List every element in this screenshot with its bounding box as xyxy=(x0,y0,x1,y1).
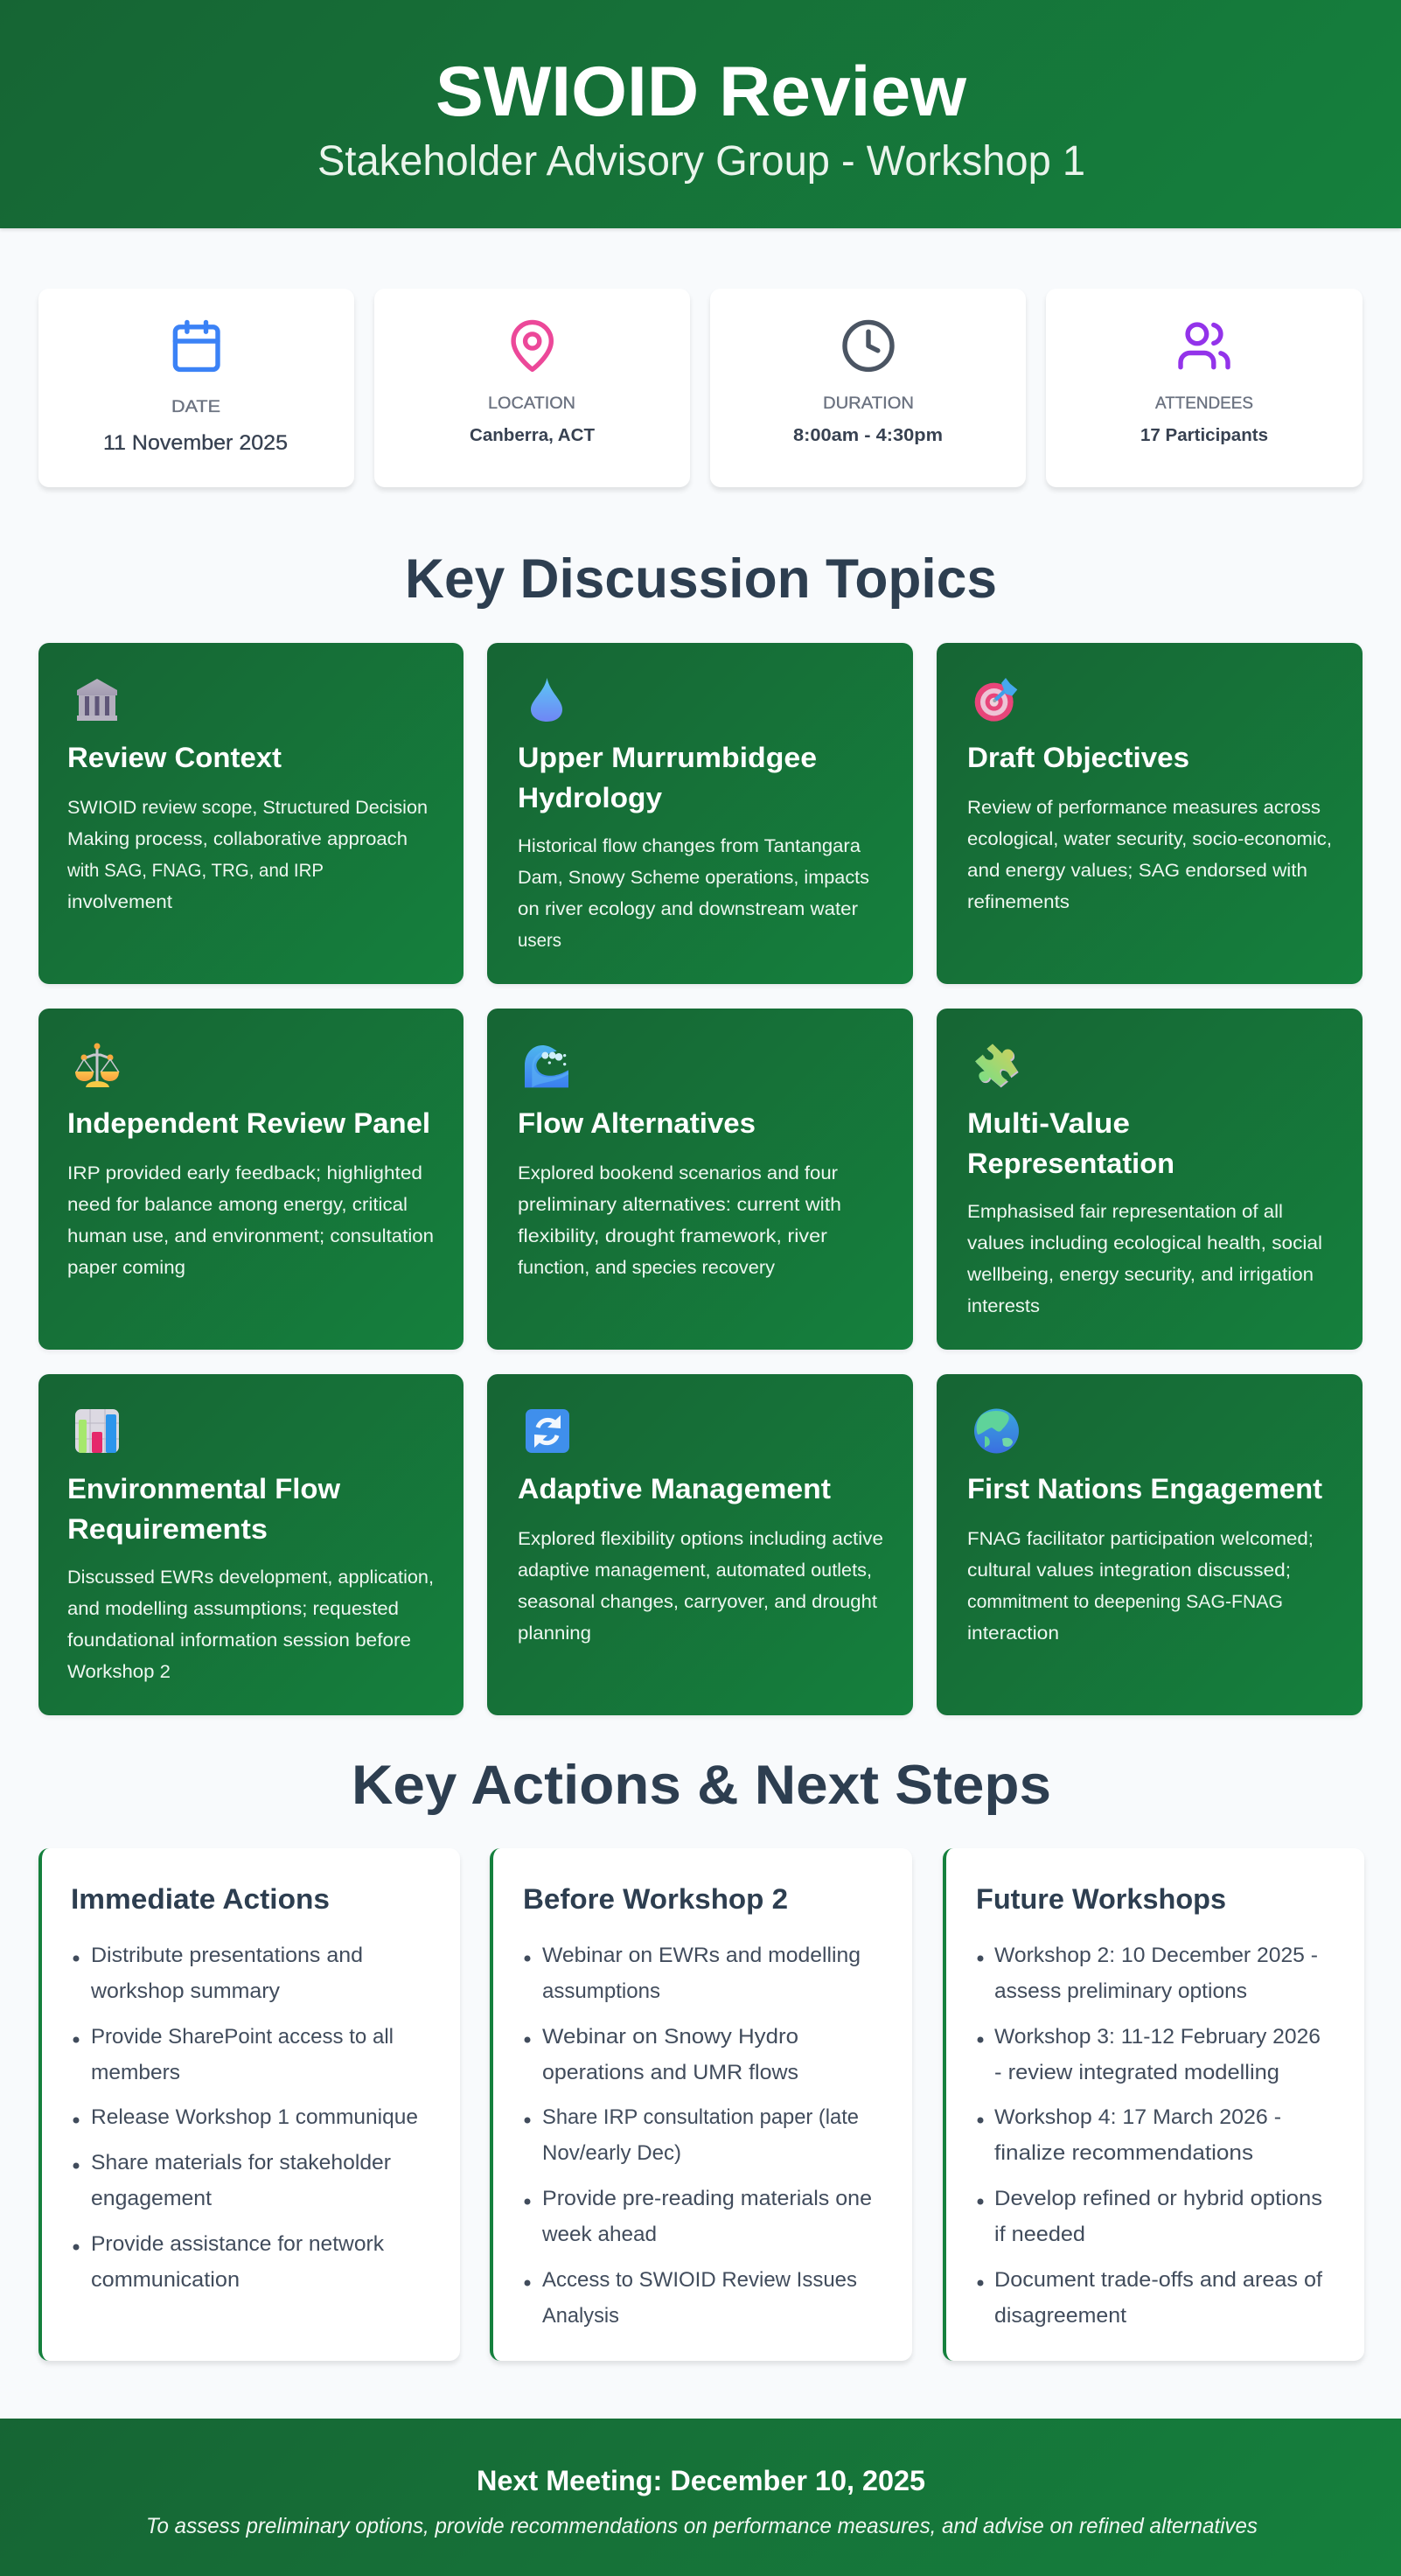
next meeting: Next Meeting: December 10, 2025 xyxy=(477,2465,925,2496)
card text: flexibility, drought framework, river xyxy=(518,1225,827,1246)
card title: Environmental Flow xyxy=(67,1473,340,1504)
subtitle: Stakeholder Advisory Group - Workshop 1 xyxy=(317,138,1085,185)
card title: Independent Review Panel xyxy=(67,1107,430,1139)
card text: foundational information session before xyxy=(67,1630,411,1651)
card text: interaction xyxy=(967,1623,1059,1644)
action list: Provide pre-reading materials one xyxy=(542,2187,872,2210)
action list xyxy=(73,1944,418,2292)
action list: assess preliminary options xyxy=(994,1979,1247,2003)
icon: balance scales xyxy=(75,1043,119,1087)
card text: interests xyxy=(967,1295,1040,1316)
card title: Requirements xyxy=(67,1513,268,1545)
card title xyxy=(967,1107,1174,1179)
card text xyxy=(518,1528,883,1644)
action list: Share IRP consultation paper (late xyxy=(542,2105,859,2129)
card text: Workshop 2 xyxy=(67,1661,171,1682)
heading: key actions and next steps: Key Actions & Next Steps xyxy=(352,1755,1051,1816)
action list: - review integrated modelling xyxy=(994,2061,1279,2084)
card text: human use, and environment; consultation xyxy=(67,1225,434,1246)
action list: Develop refined or hybrid options xyxy=(994,2187,1322,2210)
panel: upper murrumbidgee hydrology xyxy=(487,643,913,984)
value: 11 November 2025 xyxy=(103,431,288,455)
icon: globe xyxy=(974,1408,1019,1454)
card text: Explored bookend scenarios and four xyxy=(518,1162,838,1183)
action list: Workshop 3: 11-12 February 2026 xyxy=(994,2025,1321,2049)
card title xyxy=(518,742,817,813)
card text: and energy values; SAG endorsed with xyxy=(967,860,1307,881)
action list: Document trade-offs and areas of xyxy=(994,2268,1322,2292)
icon: puzzle piece xyxy=(975,1044,1019,1087)
label: LOCATION xyxy=(488,394,575,413)
action list: communication xyxy=(91,2268,240,2292)
card text xyxy=(966,1201,1322,1316)
panel: environmental flow requirements xyxy=(38,1374,464,1715)
info card: duration xyxy=(710,289,1026,487)
action list: Provide SharePoint access to all xyxy=(91,2025,394,2049)
panel: draft objectives xyxy=(937,643,1363,984)
card title xyxy=(67,1473,340,1545)
icon: calendar xyxy=(175,322,218,369)
panel: flow alternatives xyxy=(487,1009,913,1350)
card title: Hydrology xyxy=(518,782,662,813)
panel: before workshop 2 xyxy=(490,1848,912,2361)
card title: Flow Alternatives xyxy=(518,1107,756,1139)
card text xyxy=(518,1162,841,1278)
action list: finalize recommendations xyxy=(994,2141,1253,2165)
card title: Draft Objectives xyxy=(967,742,1189,773)
card text: planning xyxy=(518,1623,591,1644)
action list: Workshop 2: 10 December 2025 - xyxy=(994,1944,1318,1967)
card title: Upper Murrumbidgee xyxy=(518,742,817,773)
action list: week ahead xyxy=(541,2223,657,2246)
card text: IRP provided early feedback; highlighted xyxy=(67,1162,422,1183)
action list: Nov/early Dec) xyxy=(542,2141,681,2165)
card text: need for balance among energy, critical xyxy=(67,1194,408,1215)
card text: involvement xyxy=(67,891,172,912)
card text: on river ecology and downstream water xyxy=(518,898,858,919)
card text: Explored flexibility options including active xyxy=(518,1528,883,1549)
card text: with SAG, FNAG, TRG, and IRP xyxy=(66,860,324,881)
card text xyxy=(67,1567,434,1682)
action list: if needed xyxy=(994,2223,1085,2246)
card text: commitment to deepening SAG-FNAG xyxy=(967,1591,1283,1612)
action list: Provide assistance for network xyxy=(91,2232,385,2256)
card text: refinements xyxy=(967,891,1070,912)
action list: engagement xyxy=(91,2187,212,2210)
info card: date xyxy=(38,289,354,487)
info card: location xyxy=(374,289,690,487)
value: 17 Participants xyxy=(1140,425,1268,445)
icon: users xyxy=(1181,325,1228,367)
label: DATE xyxy=(171,398,220,416)
card text xyxy=(518,835,869,951)
action list: operations and UMR flows xyxy=(542,2061,798,2084)
card title: Representation xyxy=(967,1148,1174,1179)
panel: first nations engagement xyxy=(937,1374,1363,1715)
action list: Webinar on EWRs and modelling xyxy=(542,1944,861,1967)
card text: adaptive management, automated outlets, xyxy=(518,1560,872,1581)
card text: Historical flow changes from Tantangara xyxy=(518,835,861,856)
card title: First Nations Engagement xyxy=(967,1473,1322,1504)
action list: members xyxy=(91,2061,180,2084)
value: Canberra, ACT xyxy=(470,425,595,445)
action list: Access to SWIOID Review Issues xyxy=(542,2268,857,2292)
label: ATTENDEES xyxy=(1155,394,1253,413)
icon: classical building xyxy=(77,679,117,721)
footer band xyxy=(0,2419,1401,2576)
panel: adaptive management xyxy=(487,1374,913,1715)
card text: Discussed EWRs development, application, xyxy=(67,1567,434,1588)
icon: refresh arrows xyxy=(526,1409,569,1453)
icon: target dart xyxy=(975,678,1017,722)
action list: assumptions xyxy=(542,1979,660,2003)
card text: seasonal changes, carryover, and drought xyxy=(518,1591,877,1612)
card text xyxy=(66,797,428,912)
card text: Making process, collaborative approach xyxy=(67,828,408,849)
label: DURATION xyxy=(823,394,914,413)
info card: attendees xyxy=(1046,289,1363,487)
panel: independent review panel xyxy=(38,1009,464,1350)
card text: function, and species recovery xyxy=(518,1257,775,1278)
card text: preliminary alternatives: current with xyxy=(518,1194,841,1215)
heading: key discussion topics: Key Discussion Topics xyxy=(405,548,997,610)
card text: cultural values integration discussed; xyxy=(967,1560,1291,1581)
card title: Review Context xyxy=(67,742,282,773)
value: 8:00am - 4:30pm xyxy=(793,425,943,445)
icon: clock xyxy=(845,322,892,369)
card title: Adaptive Management xyxy=(518,1473,831,1504)
card text: paper coming xyxy=(67,1257,185,1278)
card text xyxy=(967,797,1332,912)
card title: Multi-Value xyxy=(967,1107,1130,1139)
column heading: Before Workshop 2 xyxy=(523,1883,788,1915)
action list: Workshop 4: 17 March 2026 - xyxy=(994,2105,1281,2129)
panel: multi-value representation xyxy=(937,1009,1363,1350)
card text: FNAG facilitator participation welcomed; xyxy=(967,1528,1314,1549)
icon: water drop xyxy=(531,678,562,722)
card text xyxy=(67,1162,434,1278)
icon: ocean wave xyxy=(525,1045,568,1087)
panel: immediate actions xyxy=(38,1848,460,2361)
action list: Release Workshop 1 communique xyxy=(91,2105,418,2129)
panel: review context xyxy=(38,643,464,984)
card text: users xyxy=(518,930,561,951)
card text: Dam, Snowy Scheme operations, impacts xyxy=(518,867,869,888)
card text xyxy=(967,1528,1314,1644)
action list: Share materials for stakeholder xyxy=(91,2151,391,2175)
action list xyxy=(978,1944,1322,2328)
card text: wellbeing, energy security, and irrigation xyxy=(966,1264,1314,1285)
card text: ecological, water security, socio-economic, xyxy=(967,828,1332,849)
header band xyxy=(0,0,1401,228)
action list: Webinar on Snowy Hydro xyxy=(542,2025,798,2049)
action list xyxy=(525,1944,872,2328)
meeting purpose: To assess preliminary options, provide recommendations on performance measures, and advise on refined alternatives xyxy=(146,2514,1258,2538)
card text: Review of performance measures across xyxy=(967,797,1321,818)
column heading: Future Workshops xyxy=(976,1883,1226,1915)
panel: future workshops xyxy=(943,1848,1364,2361)
card text: values including ecological health, social xyxy=(967,1232,1322,1253)
icon: bar chart xyxy=(75,1409,119,1453)
action list: disagreement xyxy=(994,2304,1126,2328)
action list: Distribute presentations and xyxy=(91,1944,363,1967)
action list: Analysis xyxy=(542,2304,619,2328)
icon: map pin xyxy=(513,322,551,369)
column heading: Immediate Actions xyxy=(71,1883,330,1915)
title: SWIOID Review xyxy=(436,52,967,131)
card text: and modelling assumptions; requested xyxy=(67,1598,399,1619)
action list: workshop summary xyxy=(90,1979,280,2003)
card text: Emphasised fair representation of all xyxy=(967,1201,1283,1222)
card text: SWIOID review scope, Structured Decision xyxy=(67,797,428,818)
